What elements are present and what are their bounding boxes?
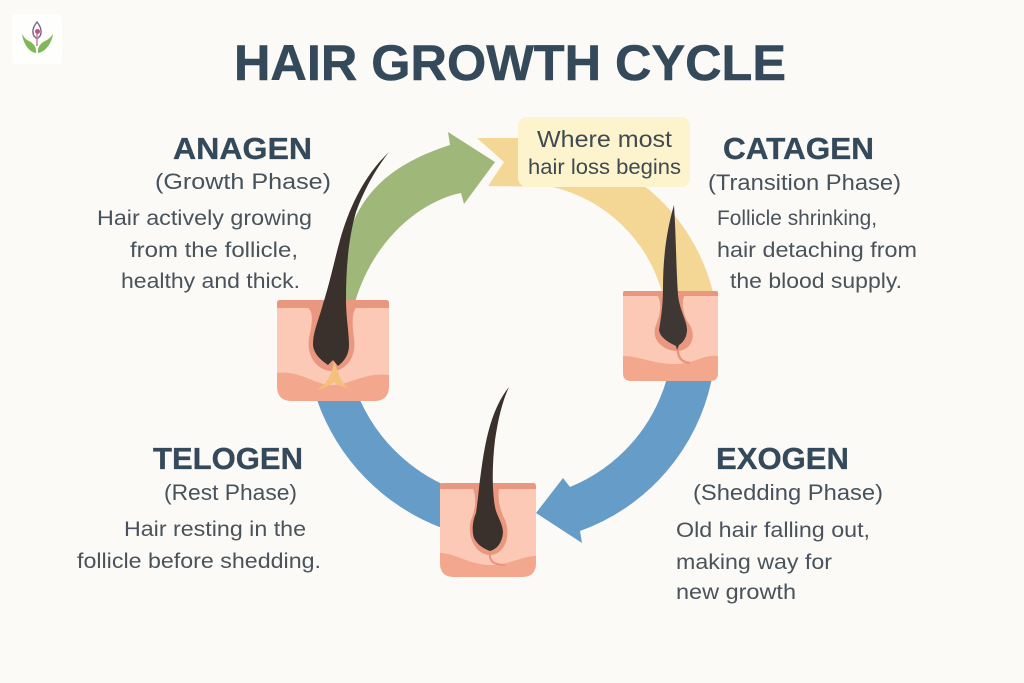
text: telogen: (Rest Phase) xyxy=(164,480,297,505)
text: telogen: follicle before shedding. xyxy=(77,549,321,573)
hair: telogen xyxy=(473,387,509,551)
hair: anagen xyxy=(313,152,389,366)
text: catagen: hair detaching from xyxy=(717,238,917,262)
title: HAIR GROWTH CYCLE xyxy=(234,35,786,91)
text: exogen: Old hair falling out, xyxy=(676,518,870,542)
arrow: blue catagen to exogen xyxy=(536,378,712,543)
hair: catagen xyxy=(659,205,687,350)
follicle: telogen xyxy=(440,387,536,577)
text: telogen: TELOGEN xyxy=(153,441,303,476)
arrow: blue telogen loop xyxy=(317,400,442,528)
text: telogen: Hair resting in the xyxy=(124,517,306,541)
text: anagen: ANAGEN xyxy=(173,131,312,166)
text: catagen: the blood supply. xyxy=(730,269,902,293)
arrow: green growth xyxy=(342,132,495,302)
arrow: yellow anagen to catagen xyxy=(477,138,713,292)
text: catagen: CATAGEN xyxy=(723,131,874,166)
text: exogen: making way for xyxy=(676,550,832,574)
logo xyxy=(12,14,62,64)
text: anagen: healthy and thick. xyxy=(121,269,300,293)
callout: Where most xyxy=(537,126,673,152)
callout: hair loss begins xyxy=(528,156,681,179)
text: exogen: (Shedding Phase) xyxy=(693,480,883,505)
follicle: catagen xyxy=(623,205,718,381)
text: anagen xyxy=(97,131,331,293)
text: exogen: EXOGEN xyxy=(716,441,849,476)
text: exogen: new growth xyxy=(676,580,796,604)
text: exogen xyxy=(676,441,883,604)
follicle: anagen xyxy=(277,152,389,401)
text: anagen: Hair actively growing xyxy=(97,206,312,230)
text: catagen xyxy=(708,131,917,293)
text: anagen: from the follicle, xyxy=(130,238,298,262)
callout xyxy=(518,117,690,187)
text: anagen: (Growth Phase) xyxy=(155,169,331,194)
text: telogen xyxy=(77,441,321,573)
text: catagen: (Transition Phase) xyxy=(708,170,901,195)
text: catagen: Follicle shrinking, xyxy=(717,206,877,230)
